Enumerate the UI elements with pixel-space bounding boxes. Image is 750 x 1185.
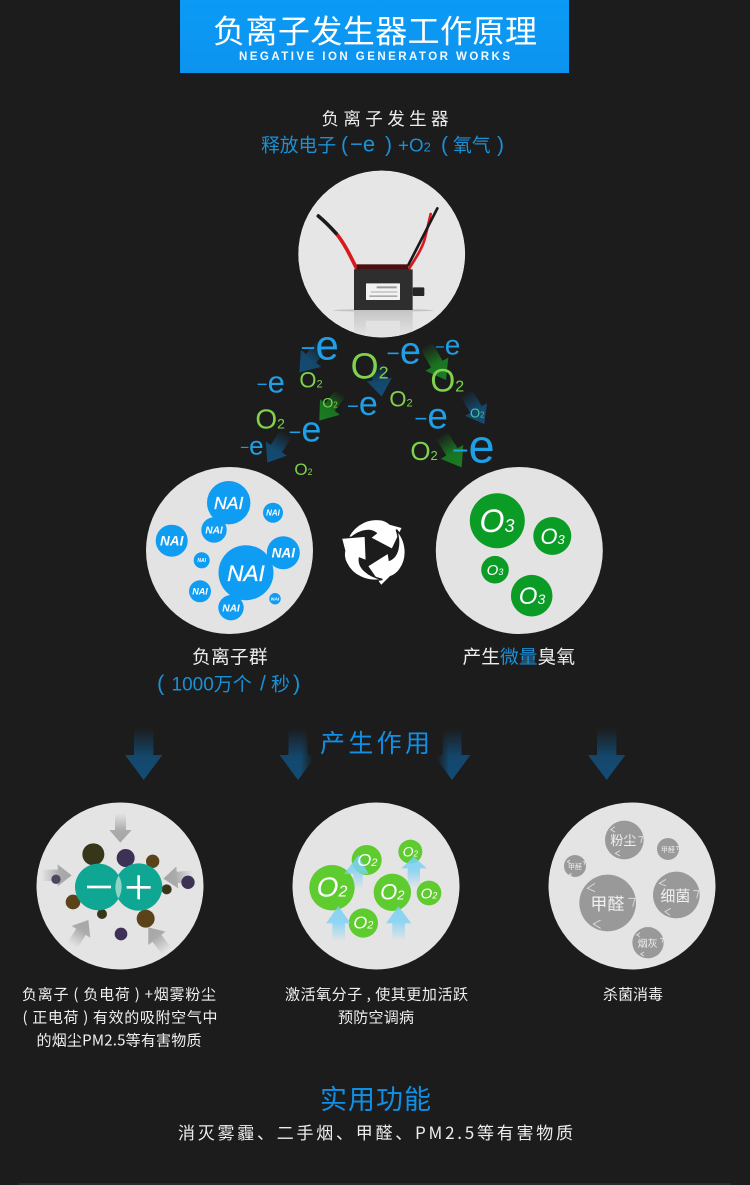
pollutant labels: 甲醛 bbox=[661, 845, 675, 855]
pollutant labels: 甲醛 bbox=[590, 890, 624, 915]
recycle icon bbox=[334, 519, 416, 591]
oxygen sphere labels bbox=[317, 844, 437, 933]
practical function heading: 实用功能 bbox=[320, 1078, 431, 1117]
generator subheading: −e bbox=[350, 132, 375, 156]
device body bbox=[354, 264, 424, 310]
oxygen sphere labels: O2 bbox=[380, 879, 405, 904]
oxygen sphere labels: O2 bbox=[317, 872, 347, 903]
NAI caption: 负离子群 bbox=[192, 642, 268, 670]
electron labels: − bbox=[301, 335, 315, 363]
down arrow 3 bbox=[438, 731, 470, 780]
electron labels: − bbox=[289, 420, 301, 445]
NAI rate: ( bbox=[157, 670, 165, 696]
oxygen labels: O2 bbox=[294, 460, 313, 479]
oxygen labels: O2 bbox=[255, 403, 285, 434]
oxygen effect caption: 预防空调病 bbox=[338, 1006, 414, 1028]
NAI ion cluster circle: NAI bbox=[227, 561, 266, 586]
ozone circle: O3 bbox=[519, 583, 545, 610]
dust effect caption bbox=[22, 984, 218, 1050]
flow arrows bbox=[257, 336, 495, 474]
NAI rate: ) bbox=[293, 670, 300, 696]
NAI ion cluster circle bbox=[146, 467, 313, 634]
ozone caption: 产生微量臭氧 bbox=[462, 642, 575, 670]
ozone circle bbox=[436, 467, 603, 634]
electron labels: − bbox=[414, 406, 427, 431]
pollutant labels bbox=[568, 830, 690, 950]
generator subheading: ( bbox=[341, 134, 348, 156]
oxygen effect caption bbox=[285, 984, 468, 1028]
electron labels bbox=[240, 321, 495, 473]
generator subheading: ) bbox=[385, 134, 392, 156]
electron labels: − bbox=[257, 374, 268, 395]
electron labels: e bbox=[301, 409, 321, 450]
oxygen labels: O2 bbox=[410, 436, 438, 466]
dust effect caption: 负离子 ( 负电荷 ) +烟雾粉尘 bbox=[22, 984, 216, 1004]
oxygen labels: O2 bbox=[389, 387, 413, 412]
oxygen labels: O2 bbox=[322, 394, 338, 410]
oxygen labels: O2 bbox=[299, 367, 323, 392]
NAI rate: 1000万个 bbox=[172, 674, 252, 696]
generator subheading: ( bbox=[441, 134, 448, 156]
down arrow 4 bbox=[588, 728, 625, 780]
NAI ion cluster circle: NAI bbox=[272, 546, 296, 561]
oxygen sphere labels: O2 bbox=[403, 844, 419, 860]
electron labels: − bbox=[240, 440, 249, 457]
germ killing circle bbox=[548, 802, 716, 970]
electron labels: e bbox=[445, 329, 460, 360]
NAI rate: / bbox=[260, 672, 266, 696]
electron labels: − bbox=[452, 435, 469, 467]
electron labels: − bbox=[387, 340, 400, 366]
oxygen sphere labels: O2 bbox=[421, 885, 437, 902]
pollutant labels: 烟灰 bbox=[638, 935, 658, 950]
NAI ion cluster circle: NAI bbox=[205, 526, 223, 537]
oxygen labels bbox=[255, 345, 485, 479]
ozone circle: O3 bbox=[540, 524, 565, 549]
title text: 负离子发生器工作原理 bbox=[213, 6, 537, 52]
oxygen sphere labels: O2 bbox=[353, 913, 373, 933]
down arrow 2 bbox=[280, 731, 312, 780]
grey inward arrows bbox=[42, 813, 194, 958]
electron labels: e bbox=[427, 395, 448, 436]
oxygen labels: O2 bbox=[351, 345, 389, 386]
device wires bbox=[318, 208, 437, 270]
NAI ion cluster circle: NAI bbox=[271, 596, 280, 602]
down arrow 1 bbox=[125, 728, 162, 780]
generator photo circle bbox=[298, 170, 465, 338]
title banner bbox=[180, 0, 569, 73]
emission scatter: arrows, electrons and oxygen bbox=[240, 321, 495, 479]
oxygen labels: O2 bbox=[430, 363, 464, 399]
practical function text: 消灭雾霾、二手烟、甲醛、PM2.5等有害物质 bbox=[178, 1119, 573, 1144]
surface shadow and reflection bbox=[333, 309, 433, 338]
ozone circle: O3 bbox=[480, 503, 514, 539]
oxygen activation circle bbox=[292, 802, 460, 970]
NAI rate: 秒 bbox=[271, 674, 290, 696]
NAI ion cluster circle: NAI bbox=[160, 534, 185, 548]
oxygen labels: O2 bbox=[470, 405, 485, 420]
generator subheading: +O bbox=[398, 134, 424, 156]
electron labels: e bbox=[268, 365, 285, 400]
dust effect caption: ( 正电荷 ) 有效的吸附空气中 bbox=[22, 1006, 218, 1028]
NAI ion cluster circle: NAI bbox=[266, 509, 281, 518]
english subtitle: NEGATIVE ION GENERATOR WORKS bbox=[239, 51, 510, 63]
electron labels: e bbox=[469, 420, 495, 473]
NAI ion cluster circle: NAI bbox=[197, 558, 207, 564]
effects heading: 产生作用 bbox=[320, 724, 430, 760]
pollutant labels: 粉尘 bbox=[610, 830, 636, 849]
rising arrows bbox=[326, 855, 427, 942]
charge circles bbox=[75, 863, 162, 911]
electron labels: e bbox=[359, 385, 378, 423]
electron labels: e bbox=[400, 330, 421, 372]
electron labels: e bbox=[249, 430, 264, 460]
particles bbox=[51, 843, 195, 940]
green oxygen spheres bbox=[309, 840, 441, 938]
pollutant labels: 甲醛 bbox=[568, 862, 582, 872]
electron labels: e bbox=[315, 321, 339, 368]
sterilize caption: 杀菌消毒 bbox=[603, 984, 663, 1004]
generator heading: 负离子发生器 bbox=[322, 106, 448, 131]
generator subheading: 2 bbox=[424, 140, 431, 154]
NAI ion cluster circle: NAI bbox=[222, 603, 240, 614]
NAI ion cluster circle: NAI bbox=[192, 586, 208, 596]
grey pollutant spheres bbox=[564, 821, 700, 958]
electron labels: − bbox=[435, 338, 445, 357]
dust effect caption: 的烟尘PM2.5等有害物质 bbox=[36, 1030, 202, 1050]
dust attraction circle bbox=[36, 802, 204, 970]
electron labels: − bbox=[347, 396, 359, 418]
NAI ion cluster circle: NAI bbox=[214, 493, 243, 513]
ozone circle: O3 bbox=[487, 562, 503, 579]
lightning marks bbox=[567, 827, 699, 956]
generator subheading: 释放电子 bbox=[261, 134, 336, 156]
pollutant labels: 细菌 bbox=[660, 885, 690, 906]
oxygen effect caption: 激活氧分子 , 使其更加活跃 bbox=[285, 984, 468, 1004]
generator subheading: 氧气 bbox=[453, 134, 491, 156]
generator subheading: ) bbox=[497, 134, 504, 156]
oxygen sphere labels: O2 bbox=[357, 850, 377, 870]
